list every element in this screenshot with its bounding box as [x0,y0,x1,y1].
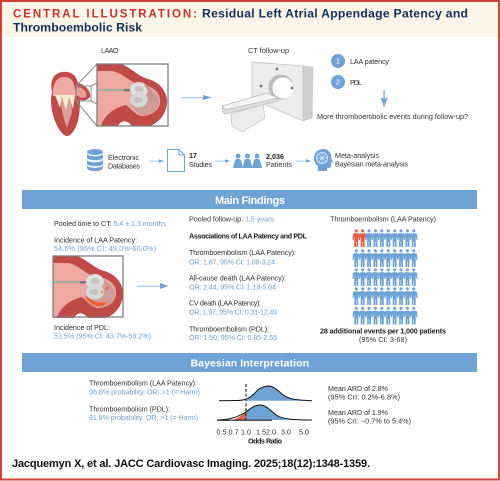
x axis labels: 3.0 [281,428,291,436]
text: mean ARD PDL [328,408,411,426]
text: electronic databases [108,153,140,170]
heading: Main Findings [22,190,477,209]
pictogram: 1000 patients [352,229,418,324]
density: PDL [217,405,312,420]
arrow: patients to analysis [296,159,311,163]
association: CV death: OR: 1.97, 95% CI: 0.31-12.49 [189,308,277,316]
panel: associations [189,214,308,342]
title banner: Thromboembolic Risk [13,20,142,34]
x axis labels: 0.5 [216,428,226,436]
association: all-cause death: OR: 2.44, 95% CI: 1.18-5.04 [189,282,276,292]
association: thromboembolism LAA: OR: 1.87, 95% CI: 1.08-3.24 [189,258,275,266]
association: thromboembolism PDL [189,324,277,342]
icon: electronic databases [87,149,103,171]
label: LAAO: LAAO [101,46,119,55]
icon: document [168,150,184,172]
x axis labels [216,428,309,436]
density: LAA patency [219,386,312,401]
numbered item 1: LAA patency: LAA patency [350,57,389,66]
pictogram title: Thromboembolism (LAA Patency) [330,214,436,224]
association: thromboembolism LAA [189,248,296,266]
arrow: incidence to associations [137,283,168,289]
association: thromboembolism PDL: OR: 1.50, 95% CI: 0.85-2.65 [189,333,277,342]
text: mean ARD LAA patency: (95% CrI: 0.2%-6.8%) [328,392,400,402]
reference line at 1.0 [245,384,247,420]
associations heading: Associations of LAA Patency and PDL [189,232,308,240]
association: all-cause death: All-cause death (LAA Patency): [189,274,286,282]
label: CT follow-up: CT follow-up [248,46,289,55]
pooled follow-up: Pooled follow-up: 1.5 years [189,214,274,224]
association: all-cause death [189,274,286,292]
text: mean ARD PDL: (95% CrI: −0.7% to 5.4%) [328,416,411,426]
image: peridevice leak [53,256,124,318]
icon: patients [233,154,262,168]
arrow: down to question [380,90,388,108]
icon: heart with zoomed LAA occluder [51,64,168,136]
x axis labels: 1.0 [241,428,251,436]
heading: Bayesian Interpretation: Bayesian Interpretation [190,358,309,370]
arrow: databases to studies [149,159,164,163]
heading: Bayesian Interpretation [22,353,477,372]
question text: More thromboembolic events during follow-up? [317,112,468,121]
title banner [2,2,498,37]
arrow: studies to patients [215,159,230,163]
x axis title: Odds Ratio [248,436,283,446]
icon: CT scanner [222,62,313,132]
icon: brain head [314,149,333,171]
arrow: LAAO to CT [181,95,212,100]
text: 17 studies [189,151,212,169]
association: thromboembolism PDL: Thromboembolism (PDL): [189,324,269,334]
numbered item 2: PDL: PDL [350,78,362,87]
incidence of LAA patency [54,236,156,253]
incidence of PDL [54,323,151,340]
association: CV death: CV death (LAA Patency): [189,298,261,308]
incidence of LAA patency: Incidence of LAA Patency: [54,236,137,244]
text: electronic databases: Databases [108,162,140,170]
incidence of PDL: Incidence of PDL: [54,323,110,332]
numbered item 2: PDL [331,75,362,89]
text: 2,036 patients [266,152,292,169]
text: bayesian probabilities: 98.8% probability, OR: >1 (= Harm) [89,388,200,396]
text: electronic databases: Electronic [108,153,139,162]
text: 17 studies: Studies [189,160,212,169]
text: mean ARD LAA patency: Mean ARD of 2.8% [328,384,389,393]
text: analysis methods [335,151,408,168]
text: 2,036 patients: 2,036 [266,152,284,161]
numbered item 1: LAA patency: 1 [336,58,340,66]
text: mean ARD PDL: Mean ARD of 1.9% [328,408,389,417]
x axis labels: 5.0 [299,428,309,436]
text: bayesian probabilities: Thromboembolism (PDL): [89,404,170,414]
incidence of PDL: 51.5% (95% CI: 43.7%-59.2%) [54,332,151,340]
pictogram caption: (95% CI: 3-68) [359,335,407,344]
panel: incidence [53,219,166,340]
text: bayesian probabilities: Thromboembolism (LAA Patency): [89,378,197,388]
x axis labels: 0.7 [228,428,238,436]
text: analysis methods: Meta-analysis [335,151,379,160]
numbered item 1: LAA patency [331,54,389,68]
text: analysis methods: Bayesian meta-analysis [335,160,408,168]
text: mean ARD LAA patency [328,384,400,402]
text: 17 studies: 17 [189,151,197,160]
incidence of LAA patency: 54.6% (95% CI: 49.0%-60.0%) [54,244,156,253]
pooled time to CT: Pooled time to CT: 5.4 ± 1.3 months [54,219,166,228]
title banner: CENTRAL ILLUSTRATION: [13,8,197,20]
panel: thromboembolism pictogram [320,214,446,344]
pictogram caption: 28 additional events per 1,000 patients [320,326,446,336]
pictogram caption [320,326,446,344]
text: 2,036 patients: Patients [266,160,292,169]
association: CV death [189,298,277,316]
x axis labels: 1.5 [256,428,266,436]
title banner: Residual Left Atrial Appendage Patency and [202,6,468,20]
text: bayesian probabilities: 81.8% probability, OR: >1 (= Harm) [89,413,198,422]
chart: posterior density of odds ratio [216,384,312,446]
text: bayesian probabilities [89,378,200,422]
heading: Main Findings: Main Findings [215,195,285,207]
x axis labels: 2.0 [266,428,276,436]
association: thromboembolism LAA: Thromboembolism (LAA Patency): [189,248,296,257]
numbered item 2: PDL: 2 [336,80,340,86]
citation: Jacquemyn X, et al. JACC Cardiovasc Imaging. 2025;18(12):1348-1359. [12,458,370,470]
